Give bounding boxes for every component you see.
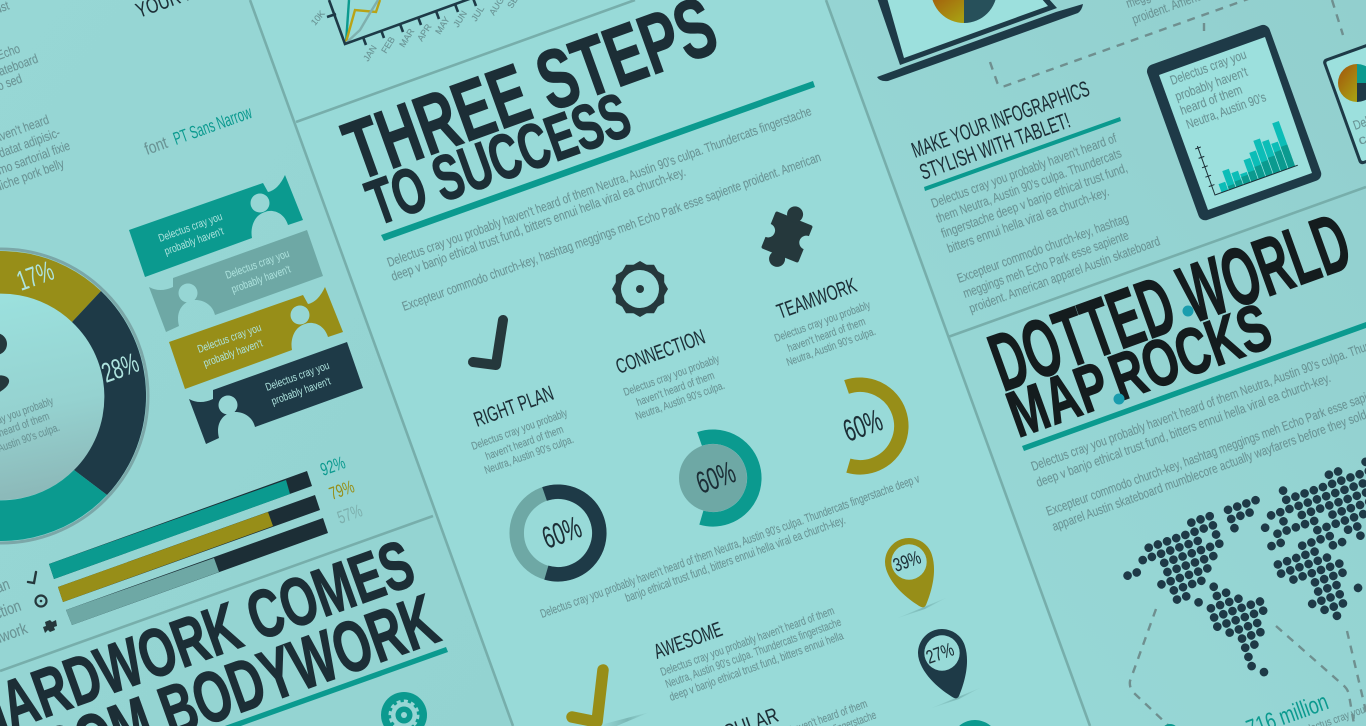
font credit: [142, 102, 255, 159]
tablet text block: fingerstache deep v banjo ethical trust fund,: [939, 160, 1129, 241]
banner: dark: [189, 342, 363, 444]
text block fragment: [0, 0, 72, 197]
title dots: [1114, 306, 1194, 404]
icon: teal gear: [381, 692, 427, 726]
line chart: 10K: [309, 9, 327, 27]
bar chart: 57%: [335, 500, 365, 528]
map marker: [1161, 724, 1179, 726]
middle text: [538, 471, 921, 621]
donut value: 17%: 17%: [13, 255, 58, 297]
heading: make your infographics: STYLISH WITH TABLET!: [916, 108, 1073, 185]
laptop pie chart: [931, 0, 997, 23]
map pin: 39%: 39%: [891, 547, 924, 577]
dashed map connectors: [1130, 609, 1366, 726]
step: right plan: haven't heard of them: [484, 424, 565, 463]
step: teamwork: [773, 274, 877, 369]
bar chart: [49, 452, 365, 625]
donut: dark 60%: 60%: [538, 509, 586, 556]
tablet text block: [929, 130, 1162, 316]
banner: teal: [129, 175, 303, 277]
step: right plan: Neutra, Austin 90's culpa.: [483, 434, 575, 477]
item: awesome: Neutra, Austin 90's culpa. Thundercats fingerstache: [664, 617, 843, 691]
title underline: [208, 647, 448, 726]
map pin: 27%: [912, 623, 982, 709]
line chart: FEB: [379, 35, 397, 55]
tablet text: [1168, 47, 1268, 132]
donut value: 28%: 28%: [98, 347, 143, 389]
donut: dark 60%: [506, 481, 610, 585]
banner: gold: [169, 287, 343, 389]
banner: gold: probably haven't: [202, 338, 264, 370]
title: dotted world map rocks: MAP.ROCKS: [998, 289, 1281, 451]
step: right plan: Delectus cray you probably: [470, 407, 569, 453]
step: right plan: [470, 382, 575, 477]
title underline: [381, 81, 815, 241]
tablet text: Delectus cray you: [1168, 47, 1248, 88]
bar chart: 79%: [327, 476, 357, 504]
tablet text block: Excepteur commodo church-key, hashtag: [955, 210, 1130, 286]
icon: person: [0, 333, 12, 401]
panel: left column: [0, 0, 448, 726]
banner: gold: Delectus cray you: [196, 322, 263, 356]
banner: teal: probably haven't: [163, 226, 225, 258]
middle text: Delectus cray you probably haven't heard of them Neutra, Austin 90's culpa. Thundercats fingerstache deep v: [538, 471, 921, 621]
tablet bar chart: [1195, 116, 1298, 196]
bar chart legend: [0, 572, 57, 657]
step: connection: [613, 326, 726, 423]
dotted world map: [1118, 462, 1366, 704]
map pin: teal: [945, 714, 1013, 726]
step: connection: haven't heard of them: [635, 370, 716, 409]
intro text: Delectus cray you probably haven't heard of them Neutra, Austin 90's culpa. Thundercats fingerstache: [385, 103, 813, 270]
item: awesome: AWESOME: [651, 618, 725, 664]
line chart: JAN: [361, 43, 379, 63]
step: connection: Neutra, Austin 90's culpa.: [634, 380, 726, 423]
panel: dotted world map: [978, 196, 1366, 726]
step: teamwork: Delectus cray you probably: [773, 299, 872, 345]
font credit: font: [142, 133, 170, 159]
line chart: MAR: [397, 26, 417, 49]
tablet text: Neutra, Austin 90's: [1184, 89, 1268, 132]
donut: gold 60%: [808, 374, 912, 478]
banner: dark: probably haven't: [270, 376, 332, 408]
map pin: 27%: 27%: [924, 639, 957, 669]
item: awesome: deep v banjo ethical trust fund, bitters ennui hella: [668, 630, 846, 704]
banner: grey: Delectus cray you: [224, 248, 291, 282]
icon: gear: [612, 261, 668, 317]
tablet text: probably haven't: [1173, 64, 1250, 104]
panel: three steps to success: [332, 0, 1013, 726]
intro text: Excepteur commodo church-key, hashtag meggings meh Echo Park esse sapiente proident. American: [400, 149, 823, 314]
step: connection: CONNECTION: [613, 326, 708, 379]
heading underline: [924, 117, 1121, 191]
tablet device: [1145, 23, 1323, 222]
tablet text block: Delectus cray you probably haven't heard of: [929, 130, 1119, 211]
small device pie chart: [1338, 64, 1366, 102]
banner: grey: [149, 230, 323, 332]
banner: dark: Delectus cray you: [264, 360, 331, 394]
title: dotted world map rocks: [978, 196, 1362, 451]
banner: grey: probably haven't: [230, 264, 292, 296]
icon: check: [473, 320, 503, 365]
step: connection: Delectus cray you probably: [622, 353, 721, 399]
tablet text block: them Neutra, Austin 90's culpa. Thundercats: [934, 145, 1124, 226]
line chart: [309, 0, 610, 63]
donut: teal 60%: 60%: [692, 454, 740, 501]
font credit: PT Sans Narrow: [171, 102, 255, 149]
item: awesome: Delectus cray you probably haven't heard of them: [659, 605, 836, 679]
banner: teal: Delectus cray you: [157, 211, 224, 245]
step: right plan: RIGHT PLAN: [471, 382, 557, 432]
donut chart: [0, 249, 148, 543]
laptop: [877, 0, 1083, 81]
bar chart: 92%: [318, 452, 348, 480]
line chart: JUN: [451, 9, 469, 29]
title: three steps to success: TO SUCCESS: [357, 79, 640, 239]
tablet text block: bitters ennui hella viral ea church-key.: [945, 184, 1111, 256]
intro text: deep v banjo ethical trust fund, bitters ennui hella viral ea church-key.: [389, 164, 688, 284]
tablet text block: proident. American apparel Austin skateboard: [967, 233, 1162, 316]
donut: gold 60%: 60%: [839, 402, 887, 449]
map pin: 39%: [879, 532, 948, 619]
tablet text block: meggings meh Echo Park esse sapiente: [961, 227, 1131, 301]
line chart: APR: [415, 22, 434, 43]
small device: [1322, 33, 1366, 165]
title underline: [1022, 322, 1366, 451]
step: teamwork: TEAMWORK: [774, 274, 860, 324]
dashed connector: [990, 0, 1343, 86]
item: spectacular: [659, 698, 878, 726]
donut: teal 60%: [661, 426, 765, 530]
middle text: banjo ethical trust fund, bitters ennui hella viral ea church-key.: [623, 513, 847, 605]
tablet text: heard of them: [1178, 82, 1244, 118]
icon: gold check: [572, 670, 650, 726]
icon: puzzle piece: [750, 197, 824, 277]
panel: tablet: [877, 0, 1366, 316]
heading: make your infographics: MAKE YOUR INFOGRAPHICS: [908, 76, 1093, 163]
step: teamwork: Neutra, Austin 90's culpa.: [785, 326, 877, 369]
item: awesome: [651, 605, 846, 704]
line chart: MAY: [433, 15, 452, 36]
line chart: JUL: [469, 4, 486, 23]
step: teamwork: haven't heard of them: [786, 316, 867, 355]
title: hardwork comes from bodywork: [0, 526, 448, 726]
donut caption: [0, 395, 61, 465]
